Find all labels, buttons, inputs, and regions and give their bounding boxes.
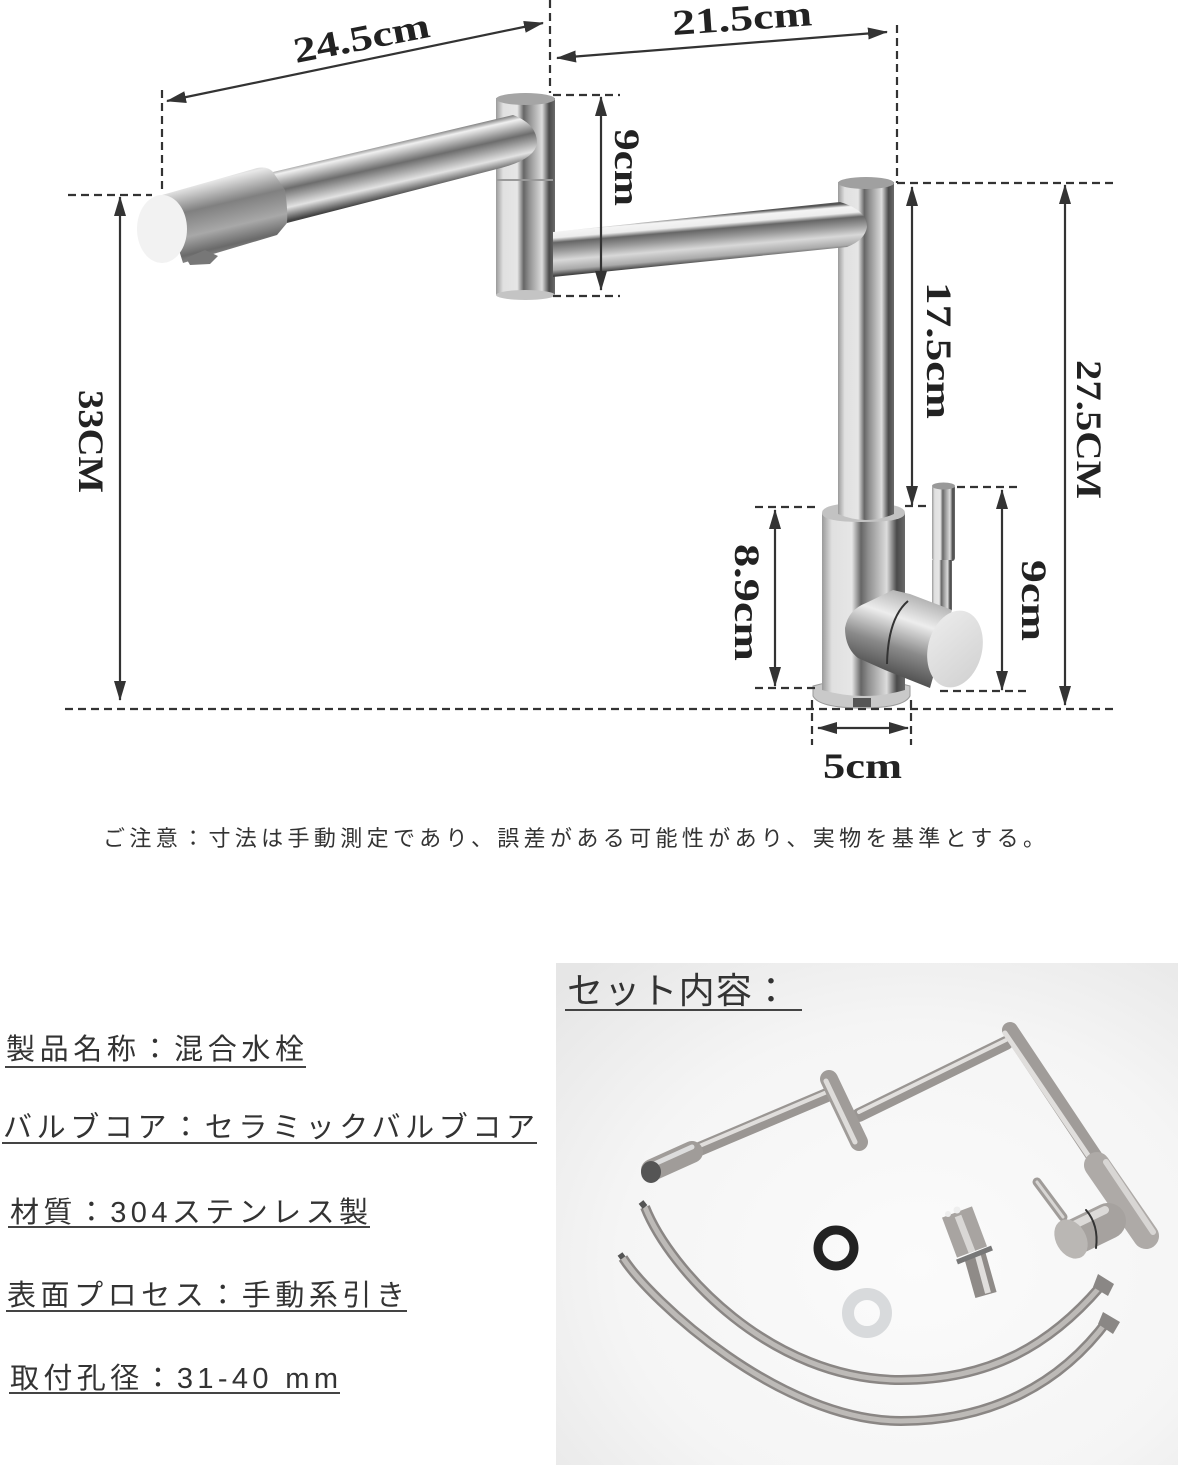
spec: valve core: バルブコア：セラミックバルブコア (3, 1111, 535, 1144)
dashed guide lines (65, 0, 1115, 745)
dimension labels: 33CM (71, 390, 111, 493)
faucet dimension diagram (65, 0, 1115, 786)
faucet: base body (813, 500, 910, 708)
dimension labels: 9cm (607, 129, 647, 206)
dimension labels: 17.5cm (919, 282, 959, 419)
faucet: upper swivel joint (496, 93, 555, 300)
measurement note: ご注意：寸法は手動測定であり、誤差がある可能性があり、実物を基準とする。 (103, 826, 1045, 851)
dimension labels: 5cm (823, 746, 902, 786)
dimension labels (71, 0, 1109, 786)
photo: faucet (641, 1030, 1153, 1265)
dimension arrows (120, 23, 1065, 728)
panel: set contents photo (556, 963, 1178, 1465)
dimension labels: 27.5CM (1069, 360, 1109, 499)
product specifications (2, 1033, 537, 1395)
dimension labels: 8.9cm (727, 544, 767, 661)
faucet: main riser (838, 177, 894, 522)
photo: black rubber washer (818, 1230, 854, 1266)
spec: surface process: 表面プロセス：手動系引き (7, 1279, 405, 1312)
set contents heading: セット内容： (567, 970, 789, 1011)
photo: white mounting ring (848, 1294, 886, 1332)
faucet: lever handle (845, 482, 991, 693)
spec: mounting hole: 取付孔径：31-40 mm (10, 1362, 338, 1395)
faucet: lower arm (553, 202, 867, 277)
spec: product name: 製品名称：混合水栓 (6, 1033, 304, 1066)
spec: material: 材質：304ステンレス製 (10, 1196, 368, 1229)
photo: cartridge connector (945, 1206, 992, 1295)
photo: braided hoses (620, 1202, 1120, 1421)
dimension labels: 24.5cm (290, 5, 433, 71)
dimension labels: 9cm (1014, 560, 1054, 641)
faucet: spout arm (137, 115, 537, 265)
